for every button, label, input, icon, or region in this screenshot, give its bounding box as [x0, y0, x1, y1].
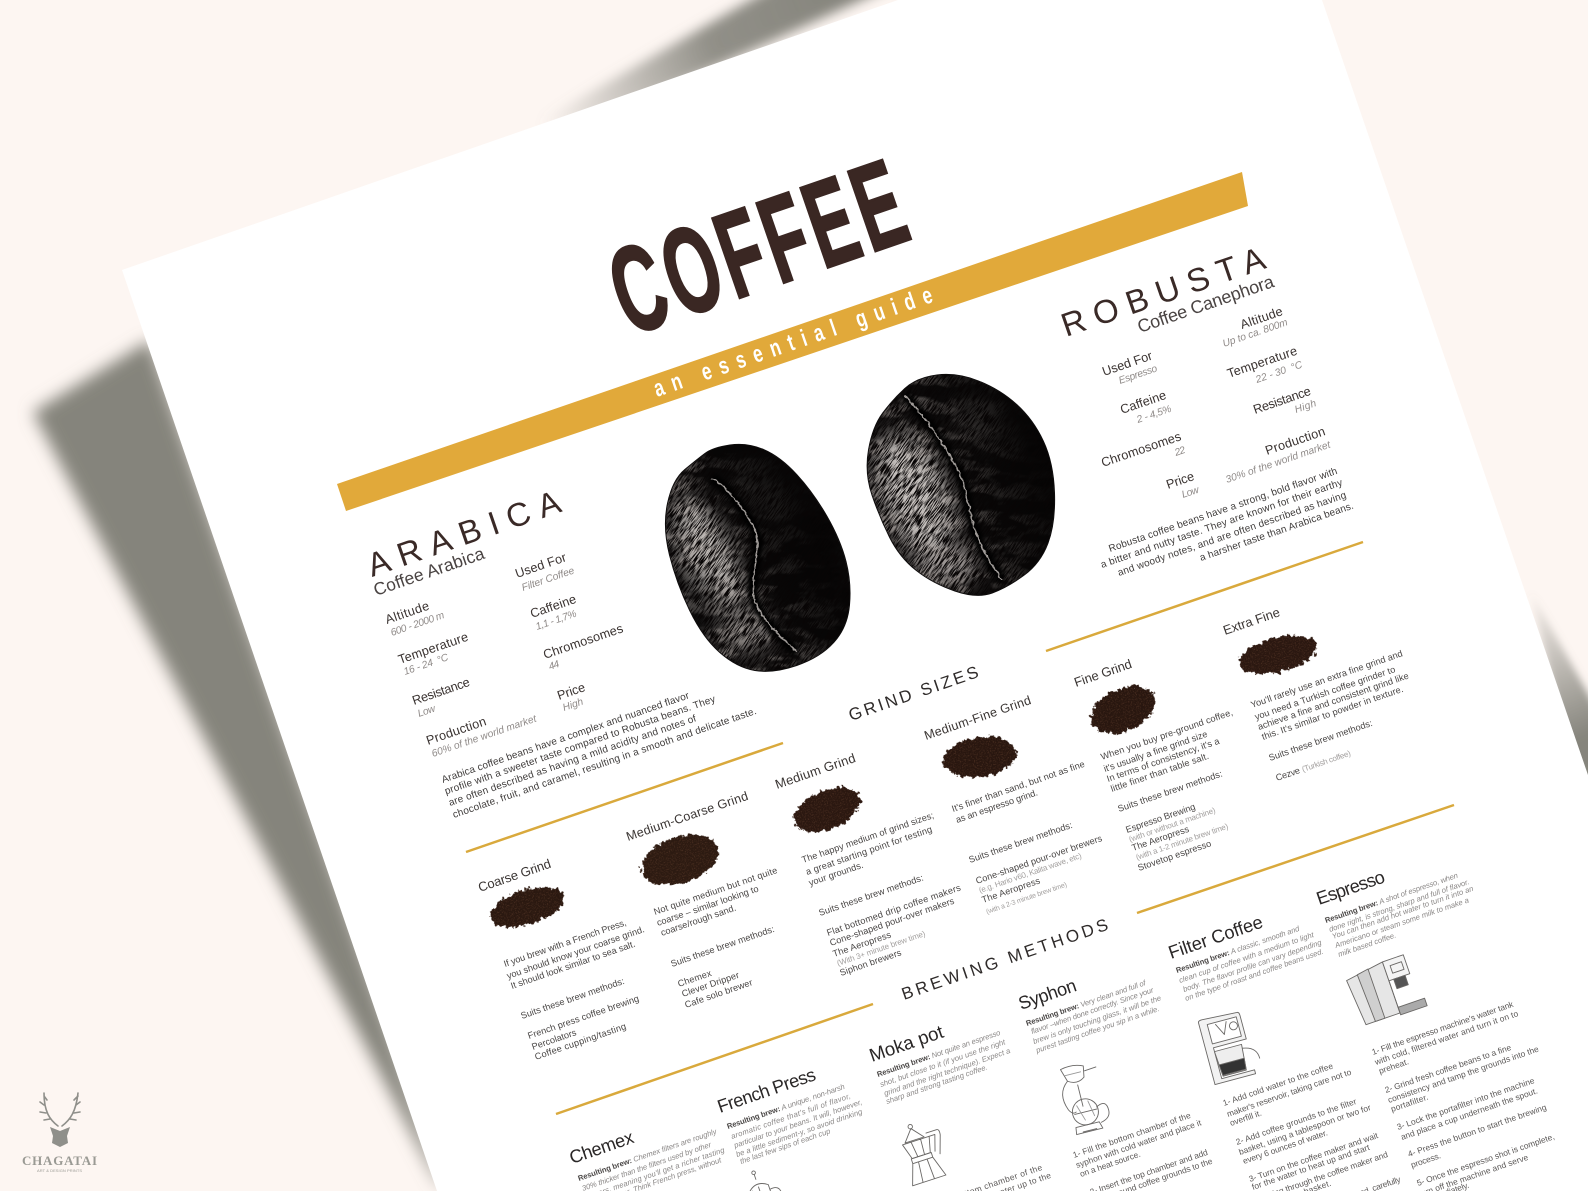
spec: chromosomes: Chromosomes	[1099, 429, 1183, 470]
image: extra fine grounds pile	[1235, 629, 1321, 681]
column: extra fine grind	[1221, 604, 1410, 783]
steps: syphon with cold water and place it	[1074, 1117, 1203, 1170]
grind name: Fine Grind	[1072, 656, 1134, 690]
panel: robusta	[1056, 239, 1355, 579]
subheading: coffee canephora: Coffee Canephora	[1135, 271, 1277, 337]
brew methods list: (Turkish coffee)	[1301, 749, 1352, 774]
steps: 2- Add coffee grounds to the filter	[1234, 1096, 1358, 1147]
description: as an espresso grind.	[954, 787, 1039, 825]
description: When you buy pre-ground coffee,	[1099, 707, 1234, 762]
brew methods list	[1267, 718, 1374, 783]
brew methods list: Suits these brew methods:	[519, 976, 626, 1021]
grind name: Medium-Coarse Grind	[624, 789, 750, 844]
steps: with cold, filtered water and turn it on to	[1372, 1008, 1520, 1067]
spec: used for: Used For	[1100, 348, 1155, 379]
heading: robusta: ROBUSTA	[1056, 239, 1270, 344]
brew methods list: Siphon brewers	[838, 947, 903, 978]
steps	[1071, 1110, 1214, 1191]
spec: production: 30% of the world market	[1224, 439, 1333, 486]
heading: brewing methods: BREWING METHODS	[899, 915, 1110, 1004]
image: coarse grounds pile	[486, 880, 568, 934]
brew methods list	[817, 873, 962, 978]
description: arabica: profile with a sweeter taste compared to Robusta beans. They	[443, 694, 717, 797]
method name: Syphon	[1015, 974, 1079, 1014]
icon: filter coffee maker	[1198, 1008, 1263, 1085]
resulting brew text: be a little sediment-y, so avoid drinking	[735, 1107, 864, 1159]
illustration: arabica coffee bean	[664, 444, 851, 672]
icon: espresso machine	[1345, 953, 1427, 1028]
spec: price	[1164, 469, 1201, 501]
image: medium-coarse grounds pile	[635, 826, 725, 894]
resulting brew text: Resulting brew: A unique, non-harsh	[726, 1082, 846, 1131]
resulting brew text: the last few sips of each cup	[739, 1126, 831, 1166]
subtitle banner: an essential guide	[650, 282, 936, 402]
steps: 3- Lock the portafilter into the machine	[1395, 1075, 1536, 1132]
brew methods list: The Aeropress	[831, 929, 893, 959]
grind name: Coarse Grind	[476, 856, 553, 895]
method name: French Press	[714, 1064, 818, 1117]
image: fine grounds pile	[1083, 677, 1163, 743]
title: COFFEE	[593, 133, 922, 361]
resulting brew text: body. The flavor profile can vary depending	[1182, 938, 1323, 994]
subheading: coffee arabica: Coffee Arabica	[371, 543, 487, 600]
spec: altitude: 600 - 2000 m	[389, 610, 446, 639]
resulting brew text: Americano or steam some milk to make a	[1333, 895, 1470, 950]
brand name: CHAGATAI	[22, 1153, 97, 1168]
brew methods list: Suits these brew methods:	[1267, 718, 1374, 763]
method name: Filter Coffee	[1165, 911, 1265, 963]
resulting brew text	[1324, 871, 1475, 959]
spec: resistance: Low	[416, 703, 438, 720]
steps: consistency and tamp the grounds into the	[1386, 1044, 1540, 1105]
description: In terms of consistency, it's a	[1105, 736, 1222, 784]
steps	[1221, 1061, 1403, 1191]
description: it's usually a fine grind size	[1102, 729, 1209, 774]
steps: and place a cup underneath the spout.	[1399, 1086, 1539, 1142]
spec: resistance: Resistance	[410, 675, 472, 708]
method: filter coffee	[1165, 911, 1403, 1191]
image: medium-fine grounds pile	[941, 732, 1019, 782]
brew methods list: Coffee cupping/tasting	[533, 1021, 627, 1062]
spec: chromosomes: Chromosomes	[541, 621, 625, 662]
icon: french press	[742, 1165, 786, 1191]
resulting brew text: purest tasting coffee you sip in a while.	[1034, 1004, 1161, 1055]
brew methods list: French press coffee brewing	[526, 993, 640, 1041]
spec: used for: Espresso	[1117, 363, 1159, 387]
resulting brew text	[1175, 924, 1325, 1003]
spec: production: Production	[1263, 424, 1327, 458]
spec: temperature: Temperature	[396, 630, 470, 667]
resulting brew text: You can then add hot water to turn it into an	[1331, 884, 1475, 941]
method: syphon	[1015, 974, 1214, 1191]
brew methods list: (with a 2-3 minute brew time)	[985, 882, 1068, 916]
steps: 1- Fill the espresso machine's water tank	[1370, 999, 1515, 1057]
resulting brew text: milk based coffee.	[1337, 931, 1397, 959]
description: Not quite medium but not quite	[652, 865, 779, 917]
steps: portafilter.	[1389, 1092, 1430, 1114]
spec: temperature: Temperature	[1225, 344, 1299, 381]
spec: price: High	[561, 696, 585, 714]
brew methods list: (with a 1-2 minute brew time)	[1135, 822, 1230, 862]
spec: resistance: High	[1293, 398, 1318, 416]
spec: altitude: Altitude	[383, 599, 431, 627]
column: coarse grind	[476, 856, 646, 1062]
resulting brew text	[876, 1028, 1011, 1106]
resulting brew text: Resulting brew: A classic, smooth and	[1175, 924, 1301, 975]
resulting brew text: flavor –when done correctly. Since your	[1030, 985, 1155, 1036]
spec: price	[555, 680, 587, 714]
resulting brew text	[1025, 978, 1162, 1055]
description: The happy medium of grind sizes;	[800, 810, 935, 865]
description: this. It's similar to powder in texture.	[1260, 684, 1405, 742]
icon: stag head	[40, 1093, 80, 1147]
description: robusta: and woody notes, and are often described as having	[1116, 490, 1348, 579]
resulting brew text: on the type of roast and coffee beans used.	[1184, 947, 1325, 1003]
description: It should look similar to sea salt.	[509, 939, 637, 991]
steps: 1- Fill the bottom chamber of the	[1071, 1110, 1192, 1160]
steps: 3- Turn on the coffee maker and wait	[1247, 1130, 1380, 1184]
brand tagline: ART & DESIGN PRINTS	[37, 1168, 82, 1173]
description: arabica: Arabica coffee beans have a complex and nuanced flavor	[440, 690, 691, 786]
resulting brew text: sharp and strong tasting coffee.	[885, 1063, 989, 1106]
brew methods list	[519, 976, 640, 1062]
method: moka pot	[866, 1021, 1053, 1191]
spec: altitude: Altitude	[1238, 304, 1285, 332]
steps: 2- Grind fresh coffee beans to a fine	[1383, 1042, 1513, 1095]
description: you should know your coarse grind.	[505, 924, 646, 981]
spec: production: Production	[424, 714, 488, 748]
steps: every 6 ounces of water.	[1241, 1127, 1329, 1166]
description: If you brew with a French Press,	[502, 917, 628, 969]
brew methods list: The Aeropress	[1130, 824, 1191, 853]
description	[1099, 707, 1234, 794]
brew methods list: Cone-shaped pour-over makers	[828, 896, 956, 948]
description: coarse – similar looking to	[655, 884, 760, 928]
spec: caffeine: Caffeine	[528, 592, 578, 621]
steps: basket, using a tablespoon or two for	[1237, 1102, 1372, 1157]
spec: temperature: 22 - 30 °C	[1253, 359, 1305, 386]
description: your grounds.	[807, 860, 865, 888]
spec: resistance: Resistance	[1251, 384, 1313, 417]
resulting brew text: grind and the right technique). Expect a	[883, 1046, 1011, 1098]
subtitle banner	[337, 172, 1248, 511]
resulting brew text: Resulting brew: Not quite an espresso	[876, 1028, 1002, 1079]
brew methods list	[669, 924, 776, 1010]
resulting brew text: done right, is strong, sharp and full of flavor.	[1328, 877, 1471, 934]
brew methods list	[1116, 769, 1230, 873]
description: arabica: chocolate, fruit, and caramel, resulting in a smooth and delicate taste.	[451, 706, 758, 821]
steps: for the water to heat up and start	[1250, 1142, 1372, 1191]
resulting brew text: shot, but close to it (if you use the right	[879, 1037, 1007, 1089]
brew methods list: Suits these brew methods:	[1116, 769, 1224, 814]
description: robusta: a bitter and nutty taste. They are known for their earthy	[1099, 477, 1344, 571]
resulting brew text: brew is only touching glass, it will be the	[1032, 993, 1162, 1046]
method: chemex	[566, 1126, 726, 1191]
brew methods list: Suits these brew methods:	[817, 873, 925, 918]
resulting brew text: Resulting brew: A shot of espresso, when	[1324, 871, 1459, 925]
resulting brew text	[726, 1082, 864, 1166]
method name: Moka pot	[866, 1021, 947, 1066]
brew methods list: (e.g. Hario v60, Kalita wave, etc)	[978, 851, 1083, 895]
method: french press	[714, 1064, 864, 1191]
spec: caffeine: 1,1 - 1,7%	[534, 609, 578, 633]
icon: syphon	[1056, 1060, 1113, 1136]
resulting brew text: particular to your beans. It will, however,	[732, 1097, 863, 1150]
grind name: Medium-Fine Grind	[922, 693, 1033, 743]
description	[1249, 648, 1410, 742]
spec: altitude: Up to ca. 800m	[1221, 317, 1290, 350]
resulting brew text: aromatic coffee that's full of flavor,	[730, 1091, 852, 1141]
brew methods list: The Aeropress	[980, 875, 1042, 905]
description: robusta: Robusta coffee beans have a strong, bold flavor with	[1107, 466, 1339, 555]
brew methods list: (With 3+ minute brew time)	[836, 929, 927, 968]
description: little finer than table salt.	[1109, 751, 1210, 794]
illustration: robusta coffee bean	[866, 374, 1056, 596]
steps: 5- Once the espresso shot is complete,	[1415, 1131, 1556, 1188]
image: medium grounds pile	[787, 779, 867, 841]
resulting brew text: Resulting brew: Chemex filters are roughly	[577, 1126, 719, 1183]
steps: 4- Press the button to start the brewing	[1406, 1102, 1548, 1159]
spec: altitude	[383, 599, 446, 639]
icon: moka pot	[894, 1116, 953, 1186]
column: medium-fine grind	[922, 693, 1104, 916]
brew methods list: Suits these brew methods:	[967, 820, 1074, 865]
spec: caffeine: 2 - 4,5%	[1134, 404, 1173, 426]
brew methods list: Clever Dripper	[680, 970, 740, 999]
method name: Chemex	[566, 1126, 636, 1168]
spec: temperature: 16 - 24 °C	[402, 652, 451, 678]
description: robusta: a harsher taste than Arabica beans.	[1198, 501, 1355, 564]
brew methods list: Cafe solo brewer	[683, 977, 754, 1010]
panel: arabica	[362, 483, 758, 821]
spec: caffeine	[1118, 388, 1173, 426]
description: You'll rarely use an extra fine grind and	[1249, 648, 1404, 710]
column: medium-coarse grind	[624, 789, 779, 1010]
spec: price: Low	[1180, 485, 1201, 501]
grind name: Medium Grind	[773, 750, 857, 792]
spec: production: 60% of the world market	[430, 713, 539, 760]
brew methods list: Suits these brew methods:	[669, 924, 776, 969]
brew methods list: Chemex	[676, 968, 713, 989]
spec: used for	[513, 550, 576, 594]
method name: Espresso	[1313, 866, 1387, 909]
steps: maker's reservoir, taking care not to	[1225, 1067, 1353, 1119]
resulting brew text: clean cup of coffee with a medium to light	[1178, 930, 1316, 985]
brew methods list: Flat bottomed drip coffee makers	[825, 882, 962, 938]
steps: overfill it.	[1228, 1108, 1263, 1128]
steps	[914, 1162, 1053, 1191]
description: coarse/rough sand.	[659, 903, 737, 938]
steps: 1- Add cold water to the coffee	[1221, 1061, 1335, 1108]
steps: preheat.	[1377, 1056, 1410, 1076]
description: a great starting point for testing	[804, 824, 933, 877]
brew methods list: Cezve	[1274, 765, 1301, 783]
brew methods list: Percolators	[530, 1027, 578, 1052]
brew methods list: (with or without a machine)	[1128, 806, 1217, 844]
spec: caffeine: Caffeine	[1118, 388, 1168, 417]
column: fine grind	[1072, 656, 1234, 873]
steps: on a heat source.	[1078, 1149, 1142, 1179]
spec: used for: Filter Coffee	[520, 565, 576, 594]
watermark logo	[22, 1093, 97, 1173]
description: It's finer than sand, but not as fine	[950, 759, 1086, 814]
spec: chromosomes: 44	[547, 659, 561, 673]
steps: process.	[1409, 1150, 1442, 1170]
column: medium grind	[773, 750, 962, 978]
spec: price: Price	[555, 680, 587, 703]
brew methods list: Cone-shaped pour-over brewers	[974, 833, 1104, 886]
description: you need a Turkish coffee grinder to	[1253, 664, 1397, 722]
spec: price: Price	[1164, 469, 1196, 492]
heading: arabica: ARABICA	[362, 483, 565, 584]
heading: grind sizes: GRIND SIZES	[846, 663, 981, 725]
spec: used for: Used For	[513, 550, 569, 581]
steps	[1370, 999, 1556, 1191]
spec: chromosomes: 22	[1172, 445, 1187, 459]
brew methods list	[967, 820, 1104, 916]
brew methods list: Stovetop espresso	[1136, 838, 1212, 873]
description: achieve a fine and consistent grind like	[1256, 671, 1410, 732]
method: espresso	[1313, 866, 1556, 1191]
resulting brew text: Resulting brew: Very clean and full of	[1025, 978, 1148, 1028]
brew methods list: Espresso Brewing	[1124, 802, 1197, 835]
description: arabica: are often described as having a mild acidity and notes of	[447, 713, 698, 809]
grind name: Extra Fine	[1221, 604, 1282, 638]
